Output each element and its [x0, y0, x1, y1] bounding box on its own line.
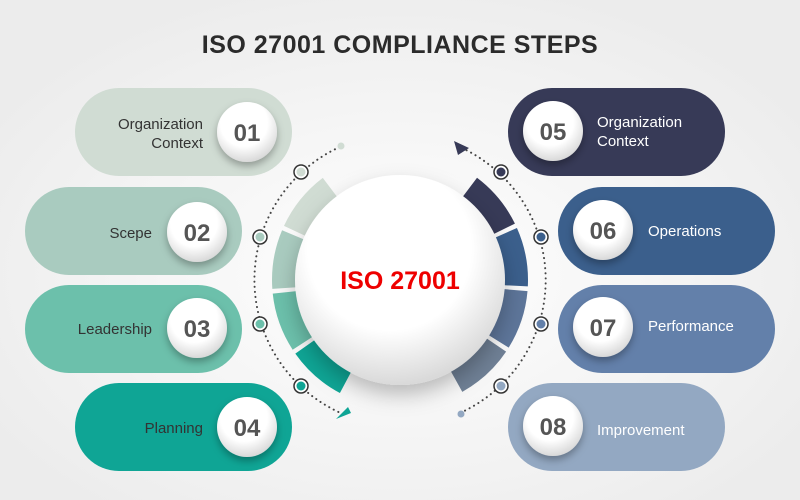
- step 03 pill: Leadership: [78, 321, 152, 338]
- dotted arc left with arrow: [253, 142, 351, 419]
- step 08 pill: 08: [540, 414, 566, 441]
- step 04 pill: 04: [234, 415, 261, 442]
- title: ISO 27001 COMPLIANCE STEPS: [202, 31, 598, 59]
- step 08 pill: [508, 383, 725, 471]
- ring segments: [242, 122, 558, 438]
- step 01 pill: Context: [151, 135, 204, 152]
- step 08 pill: Improvement: [597, 422, 685, 439]
- step 07 pill: 07: [590, 315, 616, 342]
- step 04 pill: Planning: [145, 420, 203, 437]
- step 03 pill: [25, 285, 242, 373]
- dotted arc right with arrow: [454, 141, 548, 418]
- step 01 pill: [75, 88, 292, 176]
- step 07 pill: Performance: [648, 318, 734, 335]
- step 06 pill: Operations: [648, 223, 721, 240]
- step 05 pill: 05: [540, 119, 566, 146]
- step 01 pill: 01: [234, 120, 260, 147]
- step 06 pill: 06: [590, 218, 616, 245]
- step 02 pill: 02: [184, 220, 210, 247]
- center circle: [295, 175, 505, 385]
- step 07 pill: [558, 285, 775, 373]
- step 05 pill: Organization: [597, 114, 682, 131]
- step 06 pill: [558, 187, 775, 275]
- center circle: ISO 27001: [340, 267, 460, 295]
- step 05 pill: Context: [597, 133, 650, 150]
- step 03 pill: 03: [184, 316, 210, 343]
- step 01 pill: Organization: [118, 116, 203, 133]
- step 05 pill: [508, 88, 725, 176]
- step 02 pill: Scepe: [109, 225, 152, 242]
- step 02 pill: [25, 187, 242, 275]
- step 04 pill: [75, 383, 292, 471]
